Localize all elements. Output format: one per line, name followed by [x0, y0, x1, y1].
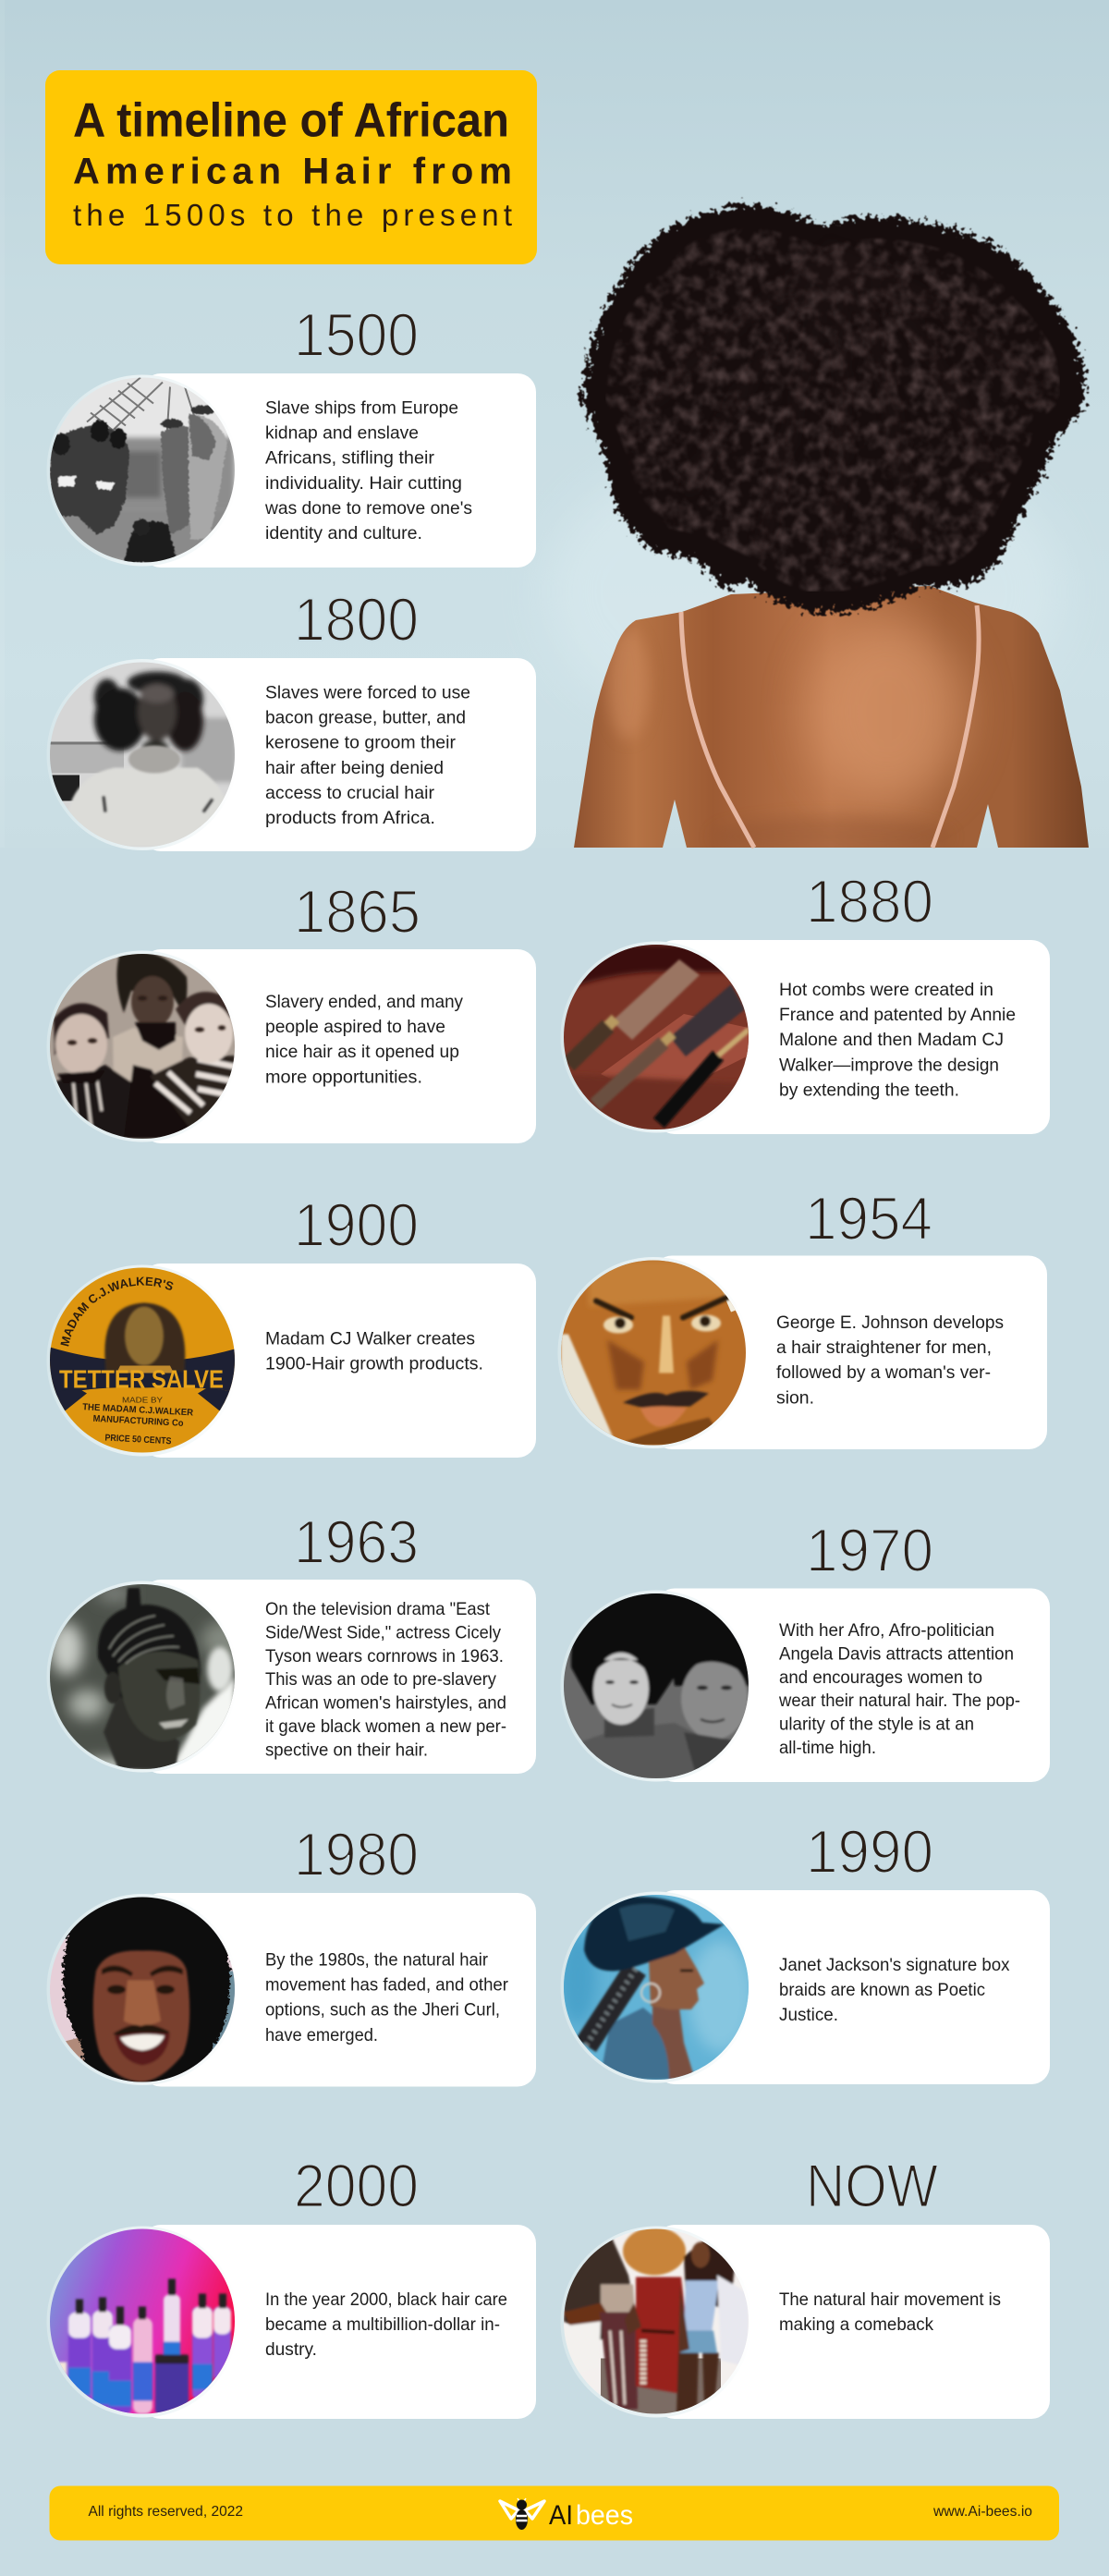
timeline entry 1500: 1500 — [294, 300, 419, 369]
photo: Tetter Salve tin: MANUFACTURING Co — [92, 1414, 184, 1429]
text — [265, 1950, 508, 2045]
text: sion. — [776, 1387, 814, 1408]
text: By the 1980s, the natural hair — [265, 1950, 488, 1971]
text — [265, 992, 463, 1087]
text: more opportunities. — [265, 1067, 422, 1087]
timeline entry 1990 — [559, 1817, 1050, 2084]
text: 1900-Hair growth products. — [265, 1354, 483, 1374]
logo wordmark: bees — [576, 2500, 633, 2531]
timeline entry 1800: 1800 — [294, 585, 419, 653]
text: dustry. — [265, 2339, 317, 2360]
text: bacon grease, butter, and — [265, 708, 466, 728]
photo: slave ship engraving — [50, 377, 235, 562]
text — [779, 2289, 1001, 2335]
text: have emerged. — [265, 2025, 378, 2045]
text — [264, 397, 472, 543]
text: African women's hairstyles, and — [265, 1693, 506, 1714]
text — [265, 682, 470, 828]
text: Angela Davis attracts attention — [779, 1643, 1014, 1664]
text: people aspired to have — [265, 1017, 445, 1037]
photo: man with Jheri curl — [50, 1893, 235, 2085]
photo: Janet Jackson in Poetic Justice — [559, 1895, 753, 2080]
text — [779, 1955, 1010, 2025]
timeline entry 1880 — [560, 867, 1050, 1134]
text: nice hair as it opened up — [265, 1042, 459, 1062]
icon: bee logo — [500, 2498, 544, 2530]
text: became a multibillion-dollar in- — [265, 2314, 500, 2335]
afro hair — [581, 204, 1084, 612]
text: products from Africa. — [265, 808, 435, 828]
text: options, such as the Jheri Curl, — [265, 2000, 500, 2021]
text: it gave black women a new per- — [265, 1716, 506, 1737]
text: and encourages women to — [779, 1667, 982, 1688]
title panel — [45, 70, 537, 264]
text — [265, 2289, 507, 2360]
text: Slavery ended, and many — [265, 992, 463, 1012]
photo: woman with voluminous hair — [50, 662, 237, 847]
title panel: American Hair from — [73, 152, 512, 192]
text: movement has faded, and other — [265, 1975, 508, 1996]
title panel: A timeline of African — [73, 94, 509, 148]
timeline entry 1900 — [46, 1190, 536, 1458]
text: followed by a woman's ver- — [776, 1362, 991, 1383]
text: making a comeback — [779, 2314, 933, 2335]
photo: Tetter Salve tin: PRICE 50 CENTS — [104, 1434, 172, 1447]
text: George E. Johnson develops — [776, 1312, 1004, 1333]
photo: women walking with natural hair — [564, 2228, 749, 2414]
text: On the television drama "East — [265, 1599, 491, 1619]
photo: Angela Davis and friend — [564, 1589, 749, 1778]
photo: three young women, sepia — [50, 952, 235, 1139]
timeline entry 1963 — [46, 1508, 536, 1778]
timeline entry 1880: 1880 — [806, 867, 933, 935]
text: Africans, stifling their — [265, 448, 435, 469]
logo wordmark: AI — [549, 2500, 573, 2531]
text: ularity of the style is at an — [779, 1715, 974, 1735]
timeline entry 1865: 1865 — [294, 877, 420, 946]
title panel: the 1500s to the present — [73, 198, 512, 232]
text: Madam CJ Walker creates — [265, 1329, 475, 1349]
text: access to crucial hair — [265, 783, 435, 803]
timeline entry 2000 — [46, 2152, 536, 2419]
photo: Cicely Tyson with cornrows — [50, 1584, 242, 1778]
timeline entry 1990: 1990 — [806, 1817, 933, 1886]
timeline entry 1954: 1954 — [805, 1184, 932, 1252]
text: With her Afro, Afro-politician — [779, 1620, 994, 1641]
text: Side/West Side," actress Cicely — [265, 1622, 501, 1642]
text: Slaves were forced to use — [265, 682, 470, 702]
photo: Tetter Salve tin: THE MADAM C.J.WALKER — [82, 1402, 194, 1418]
photo: Tetter Salve tin: MADAM C.J.WALKER'S — [61, 1277, 174, 1347]
photo: Tetter Salve tin: TETTER SALVE — [59, 1364, 224, 1394]
timeline entry 1500 — [46, 300, 536, 568]
timeline entry 1954 — [558, 1184, 1047, 1449]
timeline entry 1980 — [46, 1820, 536, 2087]
text: The natural hair movement is — [779, 2289, 1001, 2310]
text: France and patented by Annie — [779, 1005, 1016, 1025]
photo: Tetter Salve tin — [50, 1268, 235, 1453]
timeline entry 1865 — [46, 877, 536, 1143]
illustration: George E. Johnson portrait — [561, 1261, 746, 1446]
timeline entry 1970 — [560, 1516, 1050, 1782]
text: a hair straightener for men, — [776, 1337, 992, 1358]
text: Malone and then Madam CJ — [779, 1030, 1004, 1050]
text — [779, 980, 1016, 1100]
footer bar — [50, 2486, 1059, 2540]
text: hair after being denied — [265, 758, 444, 778]
photo: Tetter Salve tin: MADE BY — [122, 1396, 164, 1405]
timeline entry NOW: NOW — [806, 2152, 939, 2220]
text: Tyson wears cornrows in 1963. — [265, 1646, 504, 1666]
text — [778, 1620, 1020, 1758]
text: braids are known as Poetic — [779, 1980, 985, 2000]
text — [265, 1329, 483, 1374]
text: Hot combs were created in — [779, 980, 993, 1000]
timeline entry 1900: 1900 — [294, 1190, 419, 1259]
shoulders and back — [574, 586, 1089, 857]
text: wear their natural hair. The pop- — [778, 1691, 1020, 1711]
text: by extending the teeth. — [779, 1080, 959, 1100]
text: spective on their hair. — [265, 1740, 428, 1760]
text: This was an ode to pre-slavery — [265, 1669, 496, 1690]
timeline entry NOW — [560, 2152, 1050, 2419]
timeline entry 1800 — [46, 585, 536, 851]
text: identity and culture. — [265, 523, 422, 543]
photo: hot combs — [564, 945, 749, 1129]
text: Justice. — [779, 2005, 838, 2025]
footer bar: All rights reserved, 2022 — [89, 2504, 243, 2520]
text: In the year 2000, black hair care — [265, 2289, 507, 2310]
text: individuality. Hair cutting — [265, 473, 462, 494]
timeline entry 1963: 1963 — [294, 1508, 419, 1576]
text: was done to remove one's — [264, 498, 472, 519]
text: Walker—improve the design — [779, 1055, 999, 1075]
timeline entry 1970: 1970 — [806, 1516, 933, 1584]
footer bar: www.Ai-bees.io — [932, 2504, 1032, 2520]
hero: woman with afro seen from behind — [0, 0, 1109, 857]
text: kidnap and enslave — [265, 423, 419, 444]
text — [265, 1599, 506, 1760]
photo: hair care product bottles — [50, 2229, 235, 2414]
text: Slave ships from Europe — [265, 397, 458, 418]
timeline entry 1980: 1980 — [294, 1820, 419, 1888]
text: Janet Jackson's signature box — [779, 1955, 1010, 1975]
text — [776, 1312, 1004, 1408]
timeline entry 2000: 2000 — [294, 2152, 419, 2220]
text: all-time high. — [779, 1738, 876, 1758]
text: kerosene to groom their — [265, 733, 456, 753]
